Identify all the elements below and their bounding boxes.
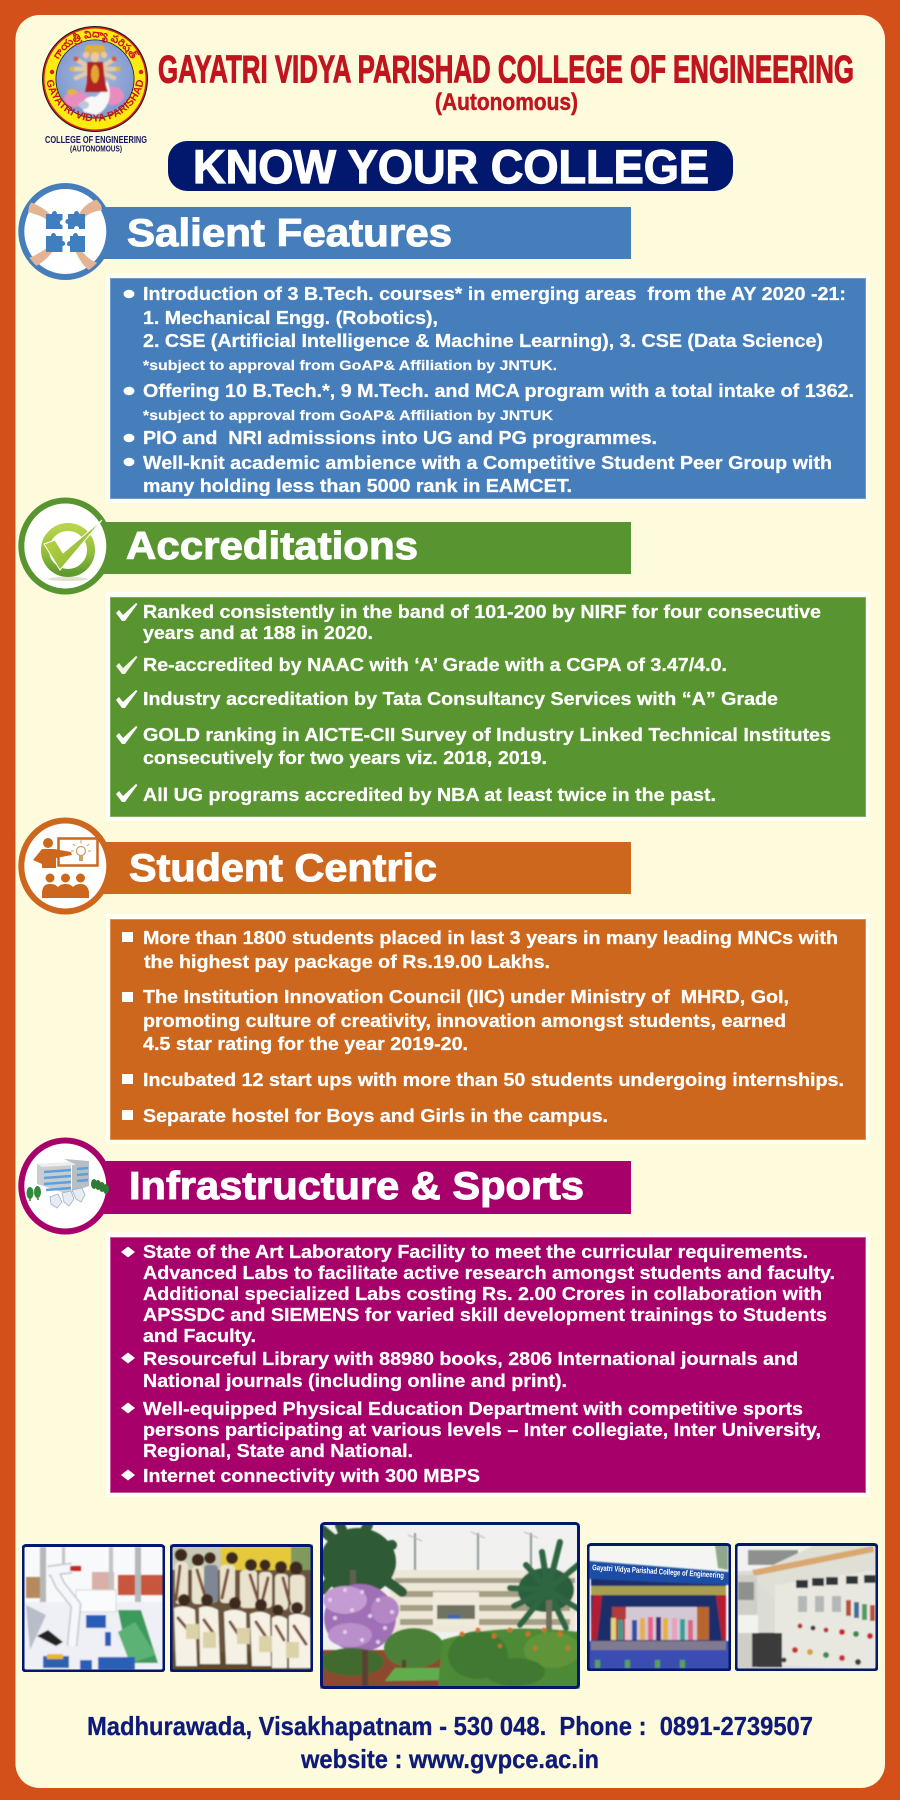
feature text: Introduction of 3 B.Tech. courses* in emerging areas from the AY 2020 -21: xyxy=(143,284,846,304)
infrastructure text: Regional, State and National. xyxy=(143,1441,413,1461)
bullets xyxy=(124,290,134,466)
feature text: *subject to approval from GoAP& Affiliation by JNTUK xyxy=(143,407,553,423)
heading bar: Infrastructure & Sports xyxy=(129,1165,584,1208)
icon: puzzle and hands xyxy=(21,186,109,277)
heading bar: Salient Features xyxy=(127,212,452,255)
infrastructure text: State of the Art Laboratory Facility to meet the curricular requirements. xyxy=(143,1242,808,1262)
garden bushes xyxy=(438,1628,580,1689)
feature text xyxy=(143,284,854,496)
icon: campus buildings xyxy=(21,1140,109,1232)
accreditation text: Industry accreditation by Tata Consultancy Services with “A” Grade xyxy=(143,689,778,709)
swan xyxy=(82,80,110,115)
infrastructure text: National journals (including online and print). xyxy=(143,1371,567,1391)
student centric text xyxy=(143,928,844,1126)
student centric text: Separate hostel for Boys and Girls in the campus. xyxy=(143,1106,608,1126)
icon: college logo: GAYATRI VIDYA PARISHAD xyxy=(46,80,143,122)
infrastructure text: and Faculty. xyxy=(143,1326,256,1346)
footer contact details xyxy=(87,1711,813,1774)
infrastructure text: persons participating at various levels – Inter collegiate, Inter University, xyxy=(143,1420,821,1440)
feature text: *subject to approval from GoAP& Affiliation by JNTUK. xyxy=(143,357,557,373)
heading bar xyxy=(100,207,631,259)
infrastructure text: Resourceful Library with 88980 books, 2806 International journals and xyxy=(143,1349,798,1369)
accreditation text: GOLD ranking in AICTE-CII Survey of Industry Linked Technical Institutes xyxy=(143,725,831,745)
feature text: 1. Mechanical Engg. (Robotics), xyxy=(143,308,438,328)
left palm xyxy=(320,1528,396,1596)
panel: salient features list xyxy=(106,273,870,503)
accreditation text: All UG programs accredited by NBA at least twice in the past. xyxy=(143,785,716,805)
logo sub caption: (AUTONOMOUS) xyxy=(70,144,122,154)
lotus xyxy=(64,91,88,107)
check bullets xyxy=(116,603,138,802)
diamond bullets xyxy=(121,1246,135,1480)
student centric text: the highest pay package of Rs.19.00 Lakhs. xyxy=(144,952,550,972)
accreditation text: years and at 188 in 2020. xyxy=(143,623,373,643)
flowering tree xyxy=(324,1584,396,1652)
heading bar xyxy=(100,522,631,574)
panel: infrastructure list xyxy=(106,1232,870,1497)
photo: campus building xyxy=(320,1522,580,1689)
heading bar: Student Centric xyxy=(129,847,437,890)
student centric text: Incubated 12 start ups with more than 50 students undergoing internships. xyxy=(143,1070,844,1090)
icon: college logo: గాయత్రీ విద్యా పరిషత్ xyxy=(54,30,140,59)
logo caption: COLLEGE OF ENGINEERING xyxy=(45,134,147,146)
website: website : www.gvpce.ac.in xyxy=(300,1744,599,1774)
accreditation text: Ranked consistently in the band of 101-200 by NIRF for four consecutive xyxy=(143,602,821,622)
feature text: 2. CSE (Artificial Intelligence & Machine Learning), 3. CSE (Data Science) xyxy=(143,331,823,351)
heading bar xyxy=(100,842,631,894)
photo strip xyxy=(22,1522,878,1689)
student centric text: More than 1800 students placed in last 3 years in many leading MNCs with xyxy=(143,928,838,948)
right palm xyxy=(518,1568,574,1612)
icon: check mark badge xyxy=(21,500,109,592)
section: accreditations xyxy=(21,500,631,592)
accreditation text: consecutively for two years viz. 2018, 2019. xyxy=(143,748,547,768)
square bullets xyxy=(122,932,133,1120)
infrastructure text xyxy=(143,1242,835,1486)
student centric text: promoting culture of creativity, innovation amongst students, earned xyxy=(143,1011,786,1031)
accreditation text xyxy=(143,602,831,805)
infrastructure text: Additional specialized Labs costing Rs. 2.00 Crores in collaboration with xyxy=(143,1284,822,1304)
student centric text: 4.5 star rating for the year 2019-20. xyxy=(143,1034,468,1054)
photo: robot lab xyxy=(22,1544,165,1672)
figure xyxy=(85,62,108,92)
student centric text: The Institution Innovation Council (IIC) under Ministry of MHRD, GoI, xyxy=(143,987,789,1007)
icon: college logo xyxy=(42,26,148,132)
heading bar: Accreditations xyxy=(126,525,418,568)
panel: student centric list xyxy=(106,914,870,1144)
banner: know your college: KNOW YOUR COLLEGE xyxy=(193,140,709,193)
feature text: many holding less than 5000 rank in EAMCET. xyxy=(143,476,572,496)
photo: electrical panel lab xyxy=(735,1543,878,1671)
infrastructure text: APSSDC and SIEMENS for varied skill development trainings to Students xyxy=(143,1305,827,1325)
accreditation text: Re-accredited by NAAC with ‘A’ Grade with a CGPA of 3.47/4.0. xyxy=(143,655,727,675)
photo: students with certificates xyxy=(170,1544,313,1672)
feature text: Well-knit academic ambience with a Competitive Student Peer Group with xyxy=(143,453,832,473)
section: salient features xyxy=(21,186,631,277)
icon: teacher and students xyxy=(21,820,109,912)
panel: accreditations list xyxy=(106,592,870,821)
infrastructure text: Internet connectivity with 300 MBPS xyxy=(143,1466,480,1486)
section: infrastructure and sports xyxy=(21,1140,631,1232)
header xyxy=(42,26,854,154)
autonomous label: (Autonomous) xyxy=(435,89,578,116)
crown and faces xyxy=(85,45,105,54)
photo: stage event xyxy=(587,1543,731,1671)
infrastructure text: Well-equipped Physical Education Department with competitive sports xyxy=(143,1399,803,1419)
feature text: Offering 10 B.Tech.*, 9 M.Tech. and MCA program with a total intake of 1362. xyxy=(143,381,854,401)
section: student centric xyxy=(21,820,631,912)
infrastructure text: Advanced Labs to facilitate active research amongst students and faculty. xyxy=(143,1263,835,1283)
feature text: PIO and NRI admissions into UG and PG programmes. xyxy=(143,428,657,448)
arms xyxy=(74,60,116,78)
heading bar xyxy=(100,1161,631,1214)
address and phone: Madhurawada, Visakhapatnam - 530 048. Phone : 0891-2739507 xyxy=(87,1711,813,1741)
